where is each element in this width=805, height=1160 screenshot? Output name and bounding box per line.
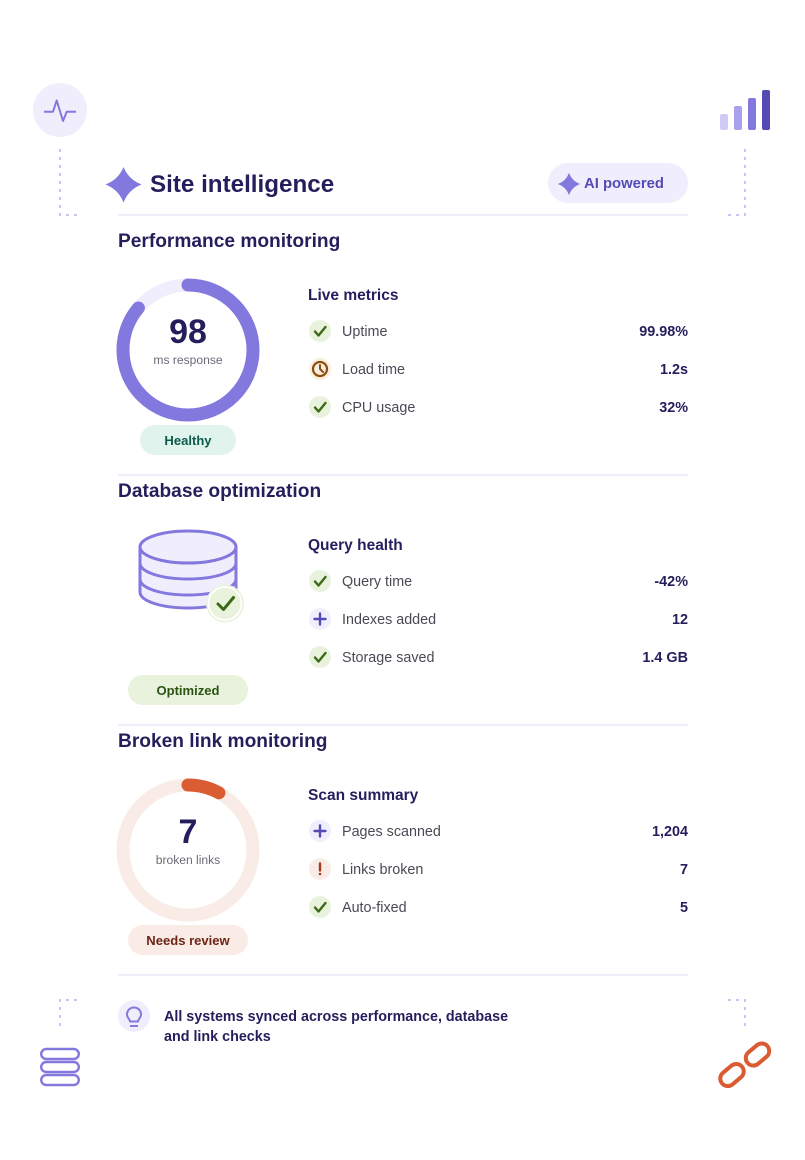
icon: signal bars <box>720 90 770 130</box>
metric: uptime <box>309 320 688 342</box>
header <box>106 163 688 203</box>
status pill: healthy: Healthy <box>164 433 212 448</box>
donut gauge: 7 broken links: broken links <box>156 853 220 867</box>
metric: query time <box>309 570 688 592</box>
metric: indexes added: 12 <box>672 612 688 628</box>
donut gauge: 98 ms response: ms response <box>153 353 223 367</box>
metric: links broken <box>309 858 688 880</box>
title: Site intelligence <box>150 171 334 198</box>
metric: storage saved: 1.4 GB <box>642 650 688 666</box>
subheading: Live metrics <box>308 287 398 304</box>
donut gauge: 98 ms response <box>116 278 260 422</box>
icon: stacked servers <box>40 1048 80 1086</box>
heading: Database optimization <box>118 481 321 502</box>
metric: load time <box>309 358 688 380</box>
metric: pages scanned <box>309 820 688 842</box>
metric: query time: Query time <box>342 574 412 590</box>
icon: pulse badge <box>33 83 87 137</box>
status pill: needs review: Needs review <box>146 933 230 948</box>
icon: light bulb <box>118 1000 150 1032</box>
metric: CPU usage: CPU usage <box>342 400 415 416</box>
metric: indexes added <box>309 608 688 630</box>
donut gauge: 98 ms response: 98 <box>169 313 207 351</box>
heading: Broken link monitoring <box>118 731 328 752</box>
metric: pages scanned: 1,204 <box>652 824 688 840</box>
metric: auto-fixed <box>309 896 688 918</box>
footer text <box>164 1009 508 1045</box>
footer text: All systems synced across performance, database <box>164 1009 508 1025</box>
status pill: healthy <box>140 425 236 455</box>
panel: broken link monitoring <box>116 731 688 955</box>
status pill: needs review <box>128 925 248 955</box>
panel: database optimization <box>118 481 688 705</box>
subheading: Query health <box>308 537 403 554</box>
icon: sparkle <box>106 167 142 202</box>
subheading: Scan summary <box>308 787 418 804</box>
panel: performance monitoring <box>116 231 688 455</box>
metric: pages scanned: Pages scanned <box>342 824 441 840</box>
status pill: optimized: Optimized <box>156 683 220 698</box>
footer text: and link checks <box>164 1029 271 1045</box>
metric: auto-fixed: 5 <box>680 900 688 916</box>
metric: storage saved <box>309 646 688 668</box>
badge: AI powered <box>548 163 688 203</box>
metric: indexes added: Indexes added <box>342 612 436 628</box>
metric: load time: Load time <box>342 362 405 378</box>
metric: auto-fixed: Auto-fixed <box>342 900 407 916</box>
heading: Performance monitoring <box>118 231 340 252</box>
badge: AI powered: AI powered <box>584 176 664 192</box>
icon: database with check <box>138 530 244 622</box>
footer note <box>118 1000 508 1045</box>
icon: broken chain link <box>718 1042 772 1088</box>
donut gauge: 7 broken links: 7 <box>179 813 197 851</box>
metric: CPU usage: 32% <box>659 400 688 416</box>
metric: uptime: Uptime <box>342 324 387 340</box>
metric: storage saved: Storage saved <box>342 650 434 666</box>
metric: CPU usage <box>309 396 688 418</box>
metric: links broken: Links broken <box>342 862 423 878</box>
status pill: optimized <box>128 675 248 705</box>
metric: links broken: 7 <box>680 862 688 878</box>
metric: uptime: 99.98% <box>639 324 688 340</box>
metric: query time: -42% <box>654 574 688 590</box>
metric: load time: 1.2s <box>660 362 688 378</box>
donut gauge: 7 broken links <box>116 778 260 922</box>
